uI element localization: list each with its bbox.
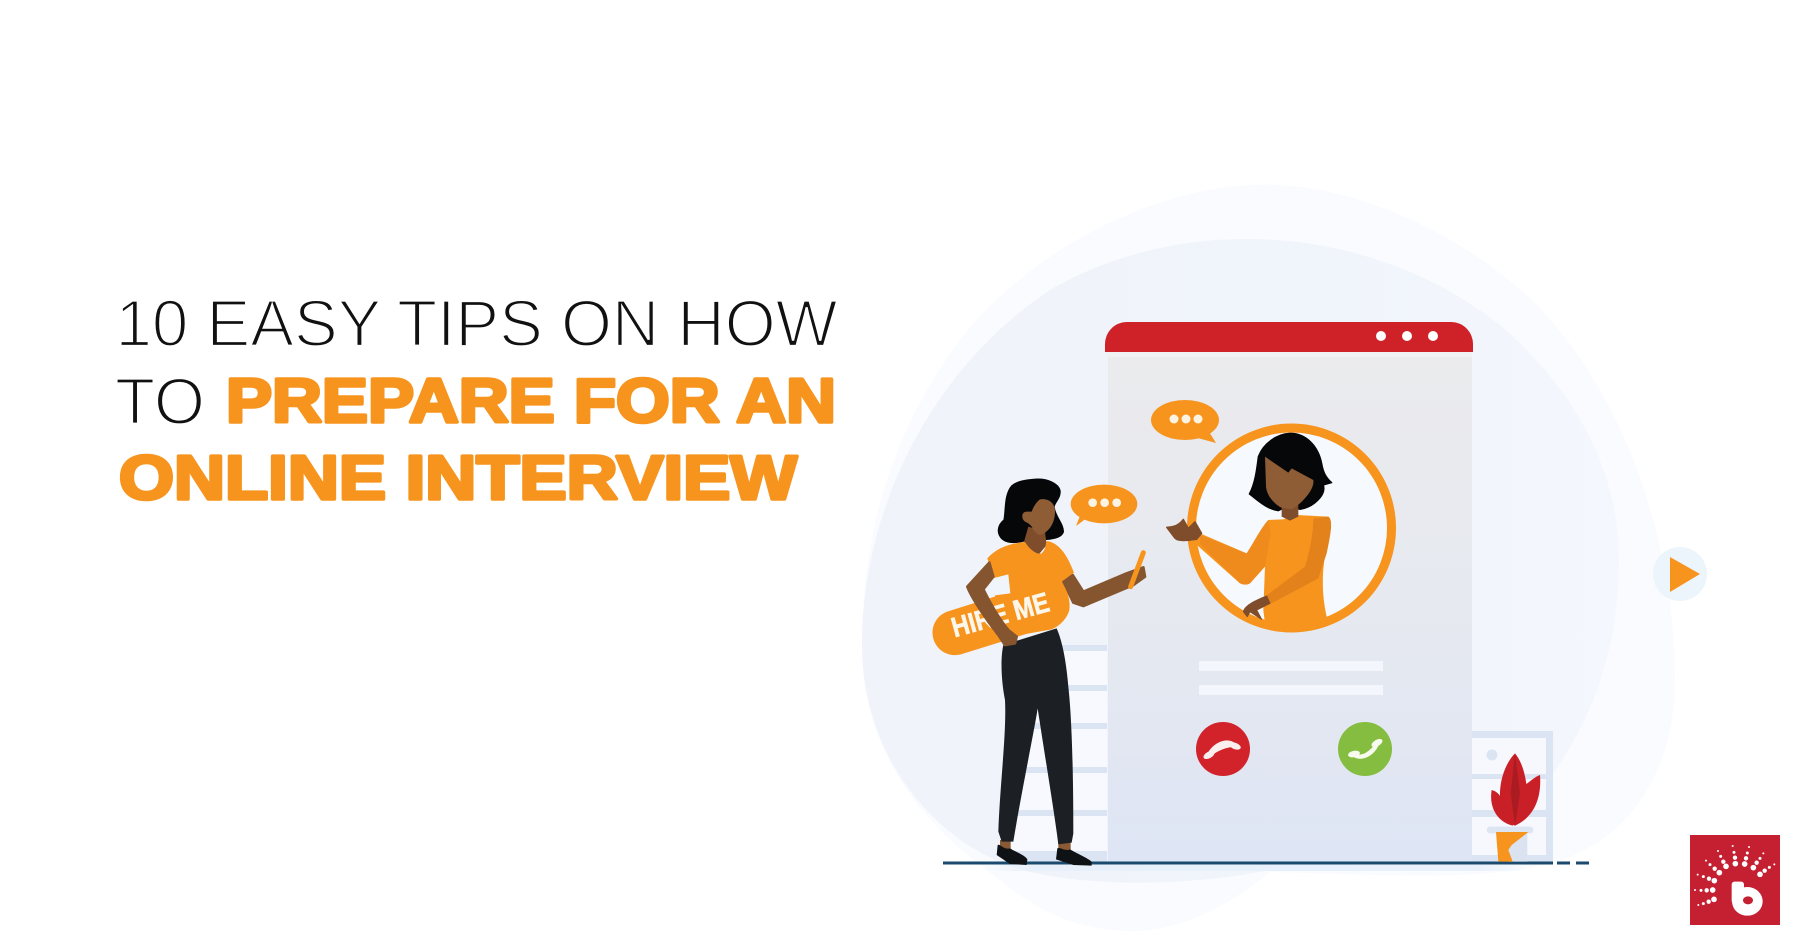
speech bubble: interviewer [1151, 400, 1219, 443]
potted plant [1487, 753, 1540, 862]
title line 3 highlight: ONLINE INTERVIEW [119, 444, 798, 513]
candidate upper body: HIRE ME [948, 587, 1053, 643]
window dots [1376, 331, 1438, 341]
candidate upper body [948, 479, 1145, 645]
decline call button [1196, 722, 1250, 776]
title line 2 highlight: PREPARE FOR AN [226, 367, 836, 436]
title line 2 lead: TO [115, 364, 205, 438]
background blob: outer light shape [862, 185, 1675, 931]
right shelf [1472, 731, 1553, 863]
ground glow [985, 865, 1530, 871]
title line 1: 10 EASY TIPS ON HOW [116, 286, 838, 360]
play icon [1653, 547, 1707, 601]
title [115, 286, 838, 513]
hire me sign [955, 605, 1043, 633]
left shelf behind panel [1010, 645, 1107, 863]
ground line [943, 862, 1589, 864]
brand logo [1690, 835, 1780, 925]
background blob: inner shape [862, 239, 1619, 883]
candidate figure [948, 479, 1145, 866]
interviewer figure [1167, 433, 1332, 630]
candidate legs and shoes [997, 628, 1092, 866]
accept call button [1338, 722, 1392, 776]
text placeholder lines [1199, 661, 1383, 695]
app window panel [1105, 322, 1473, 863]
video ring [1192, 428, 1392, 628]
interviewer in circular frame [1167, 428, 1392, 630]
speech bubble: candidate [1071, 485, 1137, 526]
window title bar [1105, 322, 1473, 352]
